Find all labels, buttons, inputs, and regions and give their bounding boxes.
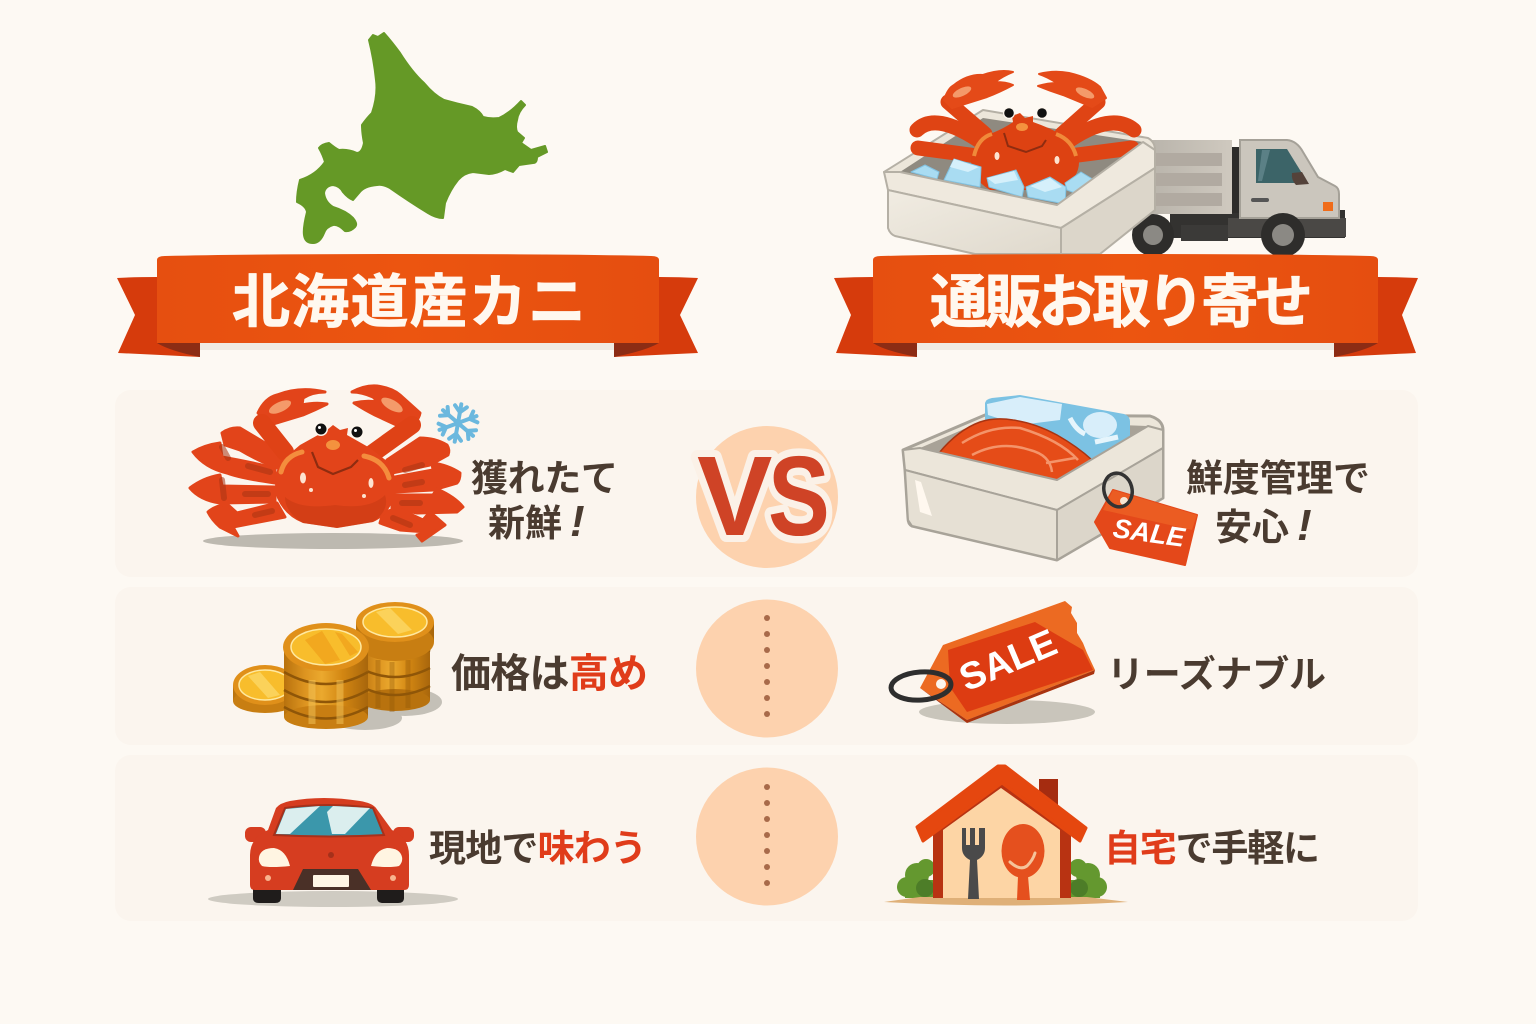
icon: salmon fillet xyxy=(939,419,1092,480)
icon: house with cutlery xyxy=(884,766,1128,906)
heading: Hokkaido crab: 北海道産カニ xyxy=(232,270,586,335)
icon: ground xyxy=(884,897,1128,906)
icon: foam box back rim xyxy=(884,110,1155,213)
icon: foam box with crab and truck xyxy=(884,71,1346,257)
ribbon: right heading xyxy=(834,254,1418,357)
text: peace of mind: 鮮度管理で xyxy=(1186,458,1370,499)
icon: back stack xyxy=(356,602,434,712)
heading: mail order: 通販お取り寄せ xyxy=(930,270,1313,335)
text: easily at home: 自宅で手軽に xyxy=(1104,828,1320,869)
icon: coin stacks xyxy=(233,602,442,730)
icon: sale tag xyxy=(1095,470,1197,565)
icon: ice block xyxy=(985,395,1130,462)
icon: fork xyxy=(962,828,985,899)
row 3 circle with dots xyxy=(696,768,838,906)
text: peace of mind xyxy=(1186,458,1370,550)
text: peace of mind: 安心! xyxy=(1215,501,1312,550)
icon: truck xyxy=(1132,140,1346,257)
icon: ice cubes xyxy=(911,159,1094,204)
badge: VS xyxy=(696,426,838,568)
text: freshly caught xyxy=(471,458,618,546)
icon: sale tag large: SALE xyxy=(954,622,1063,700)
icon: roof xyxy=(917,766,1086,841)
icon: sale tag large xyxy=(890,601,1095,724)
badge: VS: S xyxy=(768,432,830,559)
panel: convenience row xyxy=(115,755,1418,921)
icon: Hokkaido map xyxy=(297,33,547,243)
icon: left coin xyxy=(233,665,297,713)
text: freshly caught: 新鮮! xyxy=(488,497,585,546)
icon: foam box front xyxy=(884,142,1155,228)
text: savour on site: 現地で味わう xyxy=(429,828,647,869)
badge: VS: V xyxy=(697,433,772,559)
text: reasonable: リーズナブル xyxy=(1107,653,1326,695)
icon: sale tag: SALE xyxy=(1111,513,1188,553)
icon: foam box with salmon and sale tag xyxy=(903,395,1197,565)
icon: bushes xyxy=(897,859,1107,898)
panel: price row xyxy=(115,587,1418,745)
icon: red car xyxy=(208,798,458,907)
icon: snowflake xyxy=(436,401,480,445)
text: freshly caught: 獲れたて xyxy=(471,458,618,499)
icon: centre stack xyxy=(283,623,369,729)
icon: crab in box xyxy=(917,71,1134,190)
ribbon: left heading xyxy=(117,254,698,357)
icon: spoon xyxy=(1002,824,1044,900)
panel: freshness row xyxy=(115,390,1418,577)
text: price is high: 価格は高め xyxy=(451,652,648,696)
icon: crab with shadow xyxy=(190,386,463,549)
row 2 circle with dots xyxy=(696,600,838,738)
